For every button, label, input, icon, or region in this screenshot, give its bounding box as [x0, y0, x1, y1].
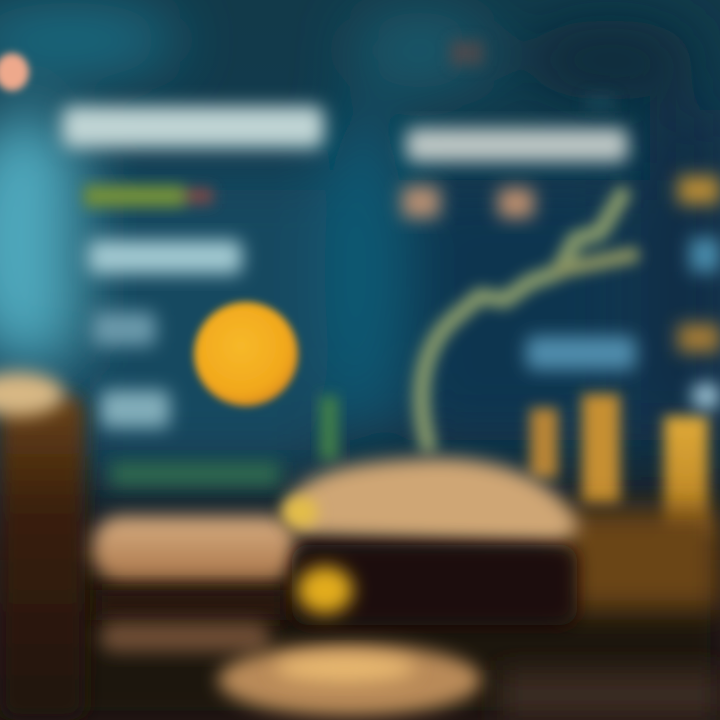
icon: glowing coin	[297, 566, 353, 614]
coin: left disc	[92, 516, 297, 652]
icon: orange corner badge	[0, 53, 29, 91]
coin: centre disc	[282, 458, 580, 625]
floor glow	[500, 670, 720, 720]
label: green subtitle	[84, 185, 213, 207]
left panel	[62, 106, 338, 486]
heading: left title	[62, 106, 324, 148]
text: blue row	[690, 238, 720, 272]
coin stack: right glow	[560, 510, 720, 610]
icon: gold coin	[194, 302, 298, 406]
line chart	[422, 195, 632, 445]
coin stack: far left	[0, 372, 85, 720]
decor: top marks	[450, 40, 615, 113]
text: value row one	[88, 240, 242, 274]
heading: right title	[406, 128, 628, 162]
bar: small green	[320, 396, 338, 460]
text: value row three	[100, 390, 170, 428]
labels: two small tags	[402, 186, 534, 218]
coin: front disc	[218, 644, 482, 716]
far right panel	[678, 176, 720, 409]
gold bars	[530, 394, 708, 536]
text: light row	[692, 383, 720, 409]
right panel	[402, 128, 708, 536]
foreground coins	[0, 372, 720, 720]
label: amber lower	[678, 324, 720, 352]
label: amber top	[678, 176, 720, 204]
text: blue value	[526, 336, 636, 370]
bar: green strip	[110, 462, 280, 486]
text: value row two	[92, 312, 156, 346]
